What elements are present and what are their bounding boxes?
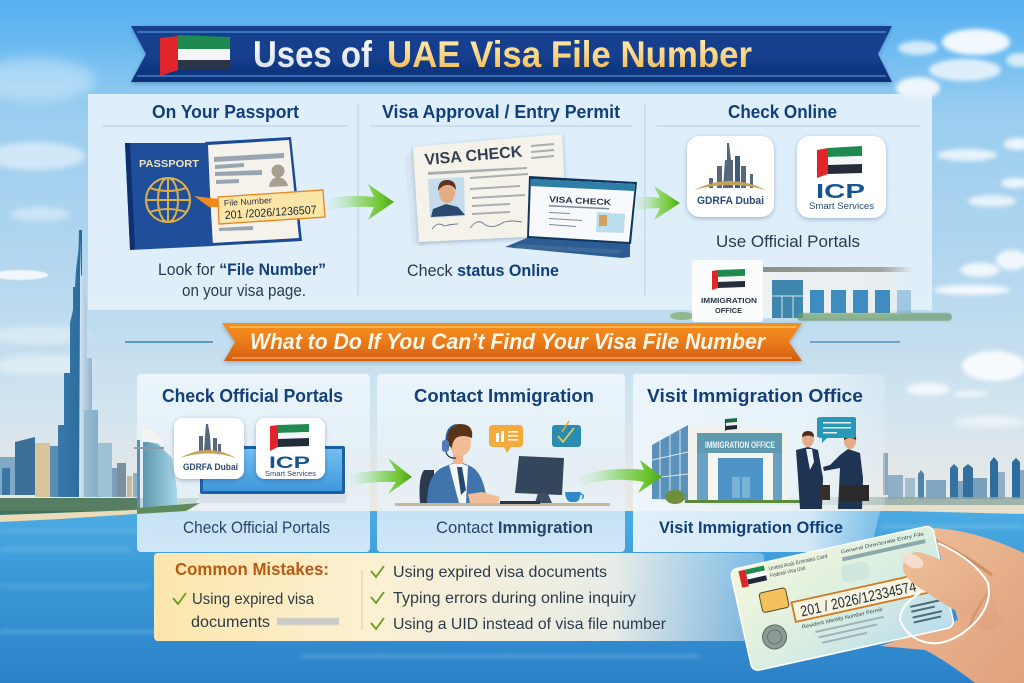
heading: Visit Immigration Office [647,386,863,406]
ICP small tile: Smart Services [265,471,317,478]
heading: On Your Passport: On Your Passport [152,102,299,122]
immigration office building [670,260,952,322]
visa document [405,134,567,246]
mug [565,492,583,502]
hand holding card [730,525,1024,683]
GDRFA Dubai small tile [174,418,244,479]
call agent [420,424,500,503]
immigration sign tile: OFFICE [715,306,742,315]
monitor [500,456,564,504]
file number tag: File Number [224,195,272,208]
left list [191,591,314,631]
right list: Typing errors during online inquiry [393,590,636,607]
left list: Using expired visa [192,591,314,608]
GDRFA Dubai small tile: GDRFA Dubai [183,462,238,472]
ICP small tile: ICP [269,453,310,472]
office building [652,418,800,504]
passport illustration: PASSPORT [139,158,200,170]
visa card [730,525,955,672]
icon: globe [146,178,190,222]
left list: documents [191,614,270,631]
heading: Common Mistakes: [175,559,329,579]
check marks [173,566,384,629]
arrow 1 [328,184,394,220]
icon: portrait silhouette [269,164,288,187]
ICP Smart Services logo tile: Smart Services [809,201,874,212]
heading: Check Official Portals [162,386,343,406]
icon: check tile [552,421,581,447]
panel: check official portals [134,374,370,552]
panel: uses [88,94,952,322]
Burj Al Arab [134,428,200,514]
Burj Khalifa skyline left [0,230,138,497]
section banner [222,323,802,361]
arrow 4 [580,460,662,493]
GDRFA Dubai logo tile: GDRFA Dubai [697,195,764,207]
visa card: Resident Identity Number Permit [802,607,883,631]
immigration sign tile [692,260,763,322]
right list: Using a UID instead of visa file number [393,616,667,633]
title: gold part: UAE Visa File Number [387,34,752,75]
ICP small tile [256,418,325,479]
sea [0,511,1024,683]
caption: Contact Immigration [436,519,593,537]
two businessmen shaking hands [796,417,869,509]
decorative side rules [125,341,900,343]
visa card: 201 / 2026/12334574 [799,578,918,620]
shoreline [0,497,1024,522]
caption: on your visa page: on your visa page. [182,282,306,300]
title: white part: Uses of [253,34,373,75]
visa card: United Arab Emirates Card [768,554,828,573]
right list [393,564,667,633]
icon: chat bubble [489,425,523,453]
panel: visit immigration office [633,374,885,552]
skyline right [883,453,1024,499]
ICP Smart Services logo tile: ICP [816,181,865,203]
passport illustration [125,137,325,250]
caption: look for file number: Look for “File Number” [158,261,326,279]
background: clouds [0,29,1024,428]
visa card: General Directorate Entry File [840,531,925,556]
icon: UAE flag [160,35,230,76]
office building: IMMIGRATION OFFICE [705,440,775,450]
ICP Smart Services logo tile [797,136,886,218]
laptop [505,176,637,258]
arrow 2 [635,186,680,220]
caption: Visit Immigration Office [659,519,843,537]
file number tag: 201 /2026/1236507 [224,204,317,222]
right list: Using expired visa documents [393,564,607,581]
caption: use official portals: Use Official Portals [716,233,860,251]
banner heading: What to Do If You Can’t Find Your Visa File Number [250,329,766,354]
caption: check status online: Check status Online [407,262,559,280]
GDRFA Dubai logo tile [687,136,774,217]
background: sky [0,0,1024,512]
panel: common mistakes [154,553,764,641]
file number tag [218,190,325,224]
thumb [903,552,1002,630]
visa document: VISA CHECK [424,143,523,169]
immigration sign tile: IMMIGRATION [701,296,757,305]
laptop: VISA CHECK [549,194,612,207]
arrow 3 [350,458,412,494]
white ring [900,543,989,643]
heading: Check Online: Check Online [728,102,837,122]
caption: Check Official Portals [183,519,330,537]
laptop screen [198,446,348,503]
heading: Visa Approval: Visa Approval / Entry Permit [382,102,620,122]
visa photo [428,177,465,218]
heading: Contact Immigration [414,386,594,406]
visa card: Federal Visa Unit [770,566,807,579]
title banner [131,26,892,82]
panel: contact immigration [377,374,625,552]
